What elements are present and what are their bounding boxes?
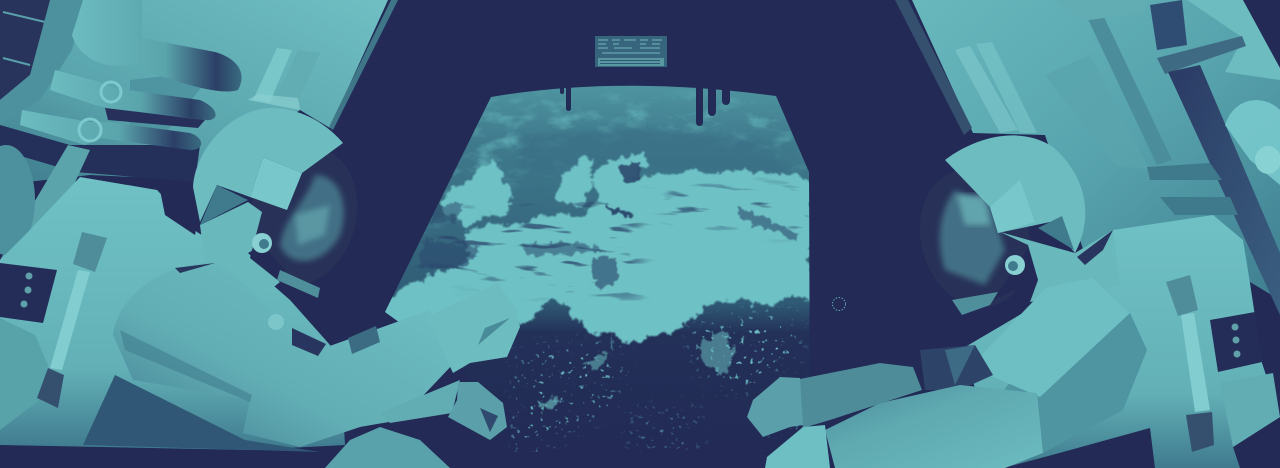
neck [1000,230,1120,302]
small dashed circle marker [832,298,846,310]
upper arm sleeve [113,263,455,447]
left wall and equipment [0,0,398,290]
chest buckle [920,345,993,390]
dark stripe between tubes [105,108,205,128]
dark wedge beneath shoulder [1005,428,1155,468]
lower body shadow [83,375,320,452]
neck seal [993,248,1038,300]
diagonal strut [0,145,90,290]
diagonal beam [1087,15,1172,165]
harness strap [50,270,90,370]
forearm lower sleeve [825,385,1043,468]
lower corner sleeve [325,427,450,468]
display panel above window [595,36,667,67]
visor [234,135,372,297]
visor [905,156,1045,320]
top bracket [1057,0,1147,20]
lower ocean scattered clouds [500,300,815,455]
neck ring [277,270,320,298]
main cloud mass [380,152,815,337]
upper cuff forearm [795,363,922,428]
left dark recess [0,0,52,100]
earth view through window [385,86,810,452]
control box [1210,312,1262,372]
torso and backpack [960,215,1280,468]
helmet dome [945,135,1085,253]
dark gaps in cloud [418,162,800,290]
dark streak texture in clouds [425,178,809,301]
helmet flap [990,180,1035,233]
neck ring [952,292,998,315]
horizontal brackets [1147,163,1222,180]
upper glove [747,377,803,437]
helmet dome [193,108,343,222]
bundled wall tubes [253,48,292,102]
crossbar [1157,36,1246,74]
small round tank [0,145,35,255]
shoulder seam [120,330,252,402]
flag patch [348,326,380,354]
neck shadow [160,190,197,235]
bundled wall tubes [955,46,1018,133]
upper thin cloud mottling [428,92,807,228]
top right light panel [1187,0,1280,80]
lower pipe [20,110,201,150]
main dark strut [1168,65,1280,315]
ear disc [1005,255,1025,275]
harness strap [1181,313,1210,412]
dark neck seal [248,245,285,282]
helmet inner wedge [200,185,248,225]
top right dark corner [1243,0,1280,68]
window drips at top of view [560,84,730,126]
mid wall panel behind tubes [130,70,215,140]
left astronaut [0,108,520,468]
shoulder flap [970,278,1130,397]
hip pouch [1220,373,1280,447]
lower glove [765,425,830,468]
left mid column [0,0,85,125]
lower glove [448,382,507,440]
lower forearm [380,380,460,423]
lower shoulder panel [1000,278,1147,453]
helmet inner wedge [1038,216,1074,250]
right astronaut [747,135,1280,468]
large curved pipe [72,0,242,92]
neck [200,202,280,302]
right side pipes [1225,100,1280,185]
cylinder [1150,0,1187,50]
torso and backpack [0,177,345,450]
ear disc [252,233,272,253]
upper dark sea patch [519,126,771,172]
chest control box [0,263,57,323]
chest buckle [292,328,326,356]
hip pouch [0,318,48,430]
wall panel [1045,55,1150,170]
dark collar patch [1077,230,1113,265]
upper glove [427,283,520,373]
helmet flap [250,157,302,210]
middle pipe [50,70,216,120]
right wall and equipment [895,0,1280,315]
